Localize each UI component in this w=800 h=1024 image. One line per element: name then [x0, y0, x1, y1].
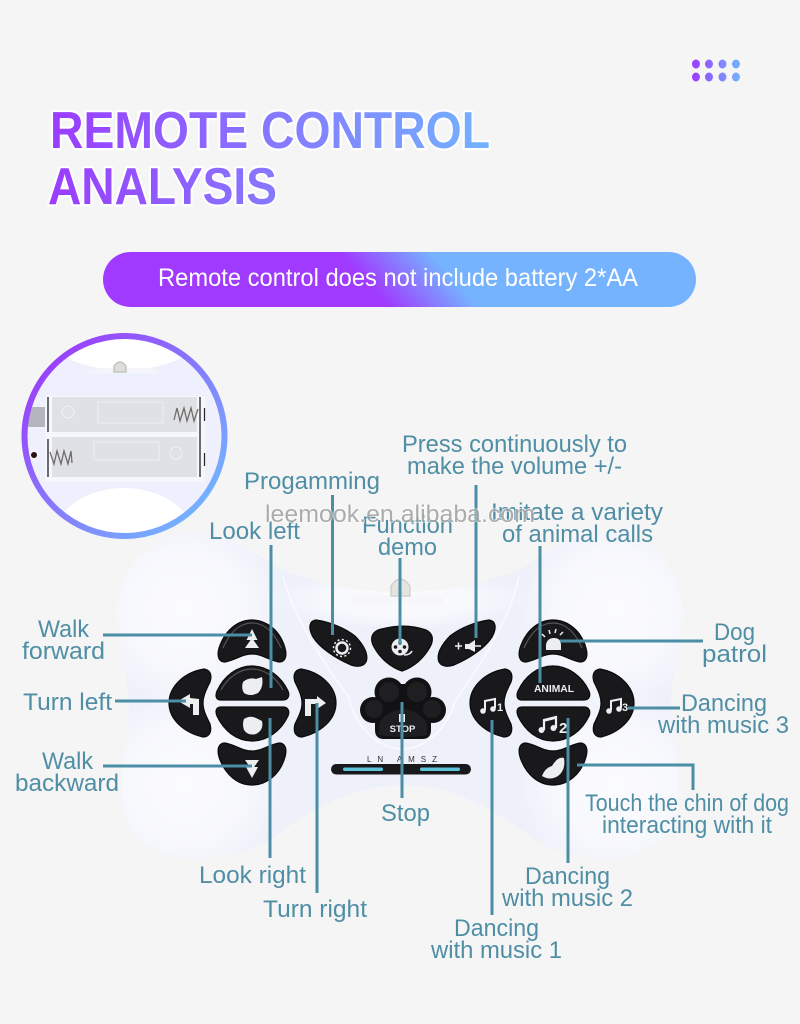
- label: dancing with music 3: with music 3: [657, 712, 789, 739]
- label: dancing with music 1: [430, 720, 562, 964]
- right function pad: 1: [497, 702, 503, 714]
- LED: [391, 579, 410, 596]
- label: dancing with music 2: [501, 718, 633, 912]
- label: animal calls: [491, 499, 663, 683]
- label: look left: Look left: [209, 518, 300, 545]
- label: turn left: Turn left: [23, 689, 112, 716]
- label: animal calls: of animal calls: [502, 521, 653, 548]
- label: dancing with music 3: Dancing: [681, 690, 767, 717]
- label: function demo: [362, 512, 453, 645]
- watermark: leemook.en.alibaba.com: [265, 501, 535, 528]
- label: touch the chin: interacting with it: [602, 812, 772, 839]
- label: animal calls: Imitate a variety: [491, 499, 663, 526]
- label: walk backward: Walk: [42, 748, 94, 775]
- label: dancing with music 2: Dancing: [525, 863, 610, 890]
- label: look right: Look right: [199, 862, 306, 889]
- label: press continuously: make the volume +/-: [407, 453, 622, 480]
- middle buttons: [310, 620, 495, 671]
- left direction pad: [169, 620, 336, 785]
- title: [48, 102, 490, 216]
- stop paw button: STOP: [390, 724, 416, 735]
- speed indicator bar: LN AMSZ: [367, 755, 437, 764]
- title: ANALYSIS: [48, 158, 277, 216]
- battery notice pill: Remote control does not include battery 2*AA: [158, 264, 638, 292]
- battery notice pill: [103, 252, 696, 307]
- label: stop: Stop: [381, 800, 430, 827]
- label: dancing with music 1: with music 1: [430, 937, 562, 964]
- label: turn right: Turn right: [263, 896, 367, 923]
- label: programming: Progamming: [244, 468, 380, 495]
- right function pad: ANIMAL: [534, 683, 575, 695]
- decorative dot grid icon: [692, 60, 740, 82]
- label: dog patrol: [560, 619, 767, 668]
- label: dancing with music 3: [628, 690, 789, 739]
- label: dog patrol: patrol: [702, 641, 767, 668]
- label: walk backward: [15, 748, 252, 797]
- label: dancing with music 2: with music 2: [501, 885, 633, 912]
- inset: battery compartment: [22, 333, 228, 539]
- label: dancing with music 1: Dancing: [454, 915, 539, 942]
- right function pad: 2: [559, 720, 567, 737]
- label: function demo: demo: [378, 534, 437, 561]
- label: function demo: Function: [362, 512, 453, 539]
- stop paw button: [360, 678, 446, 739]
- label: walk forward: [22, 616, 252, 665]
- label: touch the chin: [577, 765, 789, 839]
- label: press continuously: [402, 431, 627, 638]
- label: dog patrol: Dog: [714, 619, 755, 646]
- right function pad: 3: [622, 702, 628, 714]
- title: REMOTE CONTROL: [50, 102, 490, 160]
- right function pad: [470, 620, 634, 785]
- label: press continuously: Press continuously to: [402, 431, 627, 458]
- label: stop: [381, 702, 430, 827]
- label: walk forward: Walk: [38, 616, 90, 643]
- remote control body: [161, 577, 639, 809]
- label: walk forward: forward: [22, 638, 105, 665]
- speed indicator bar: [331, 755, 471, 774]
- label: walk backward: backward: [15, 770, 119, 797]
